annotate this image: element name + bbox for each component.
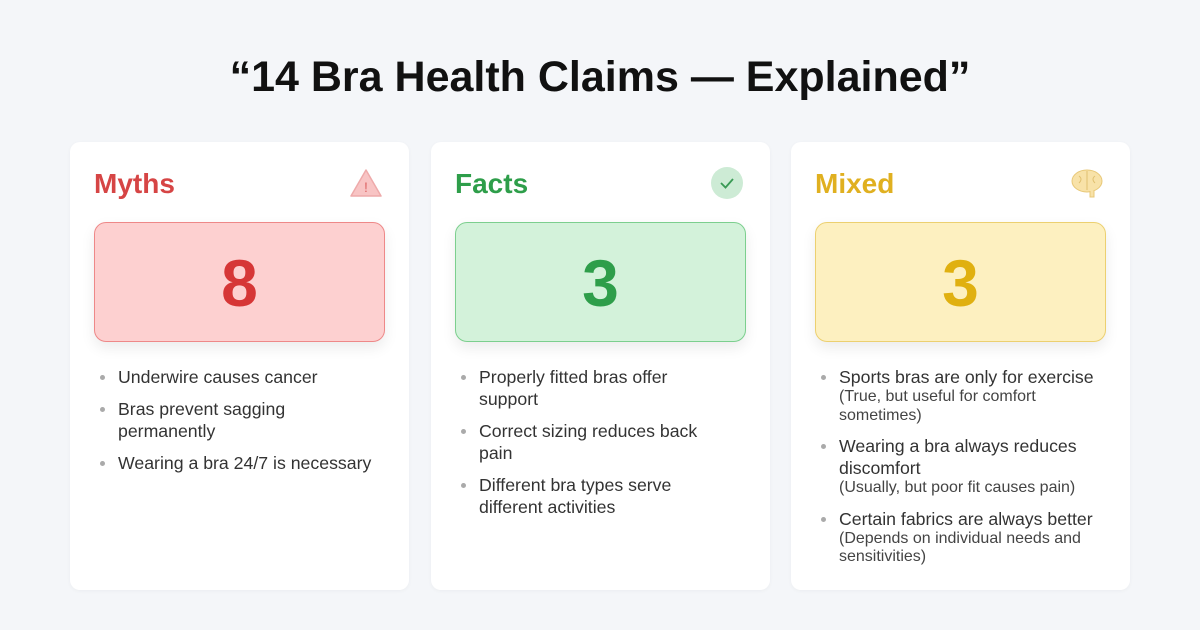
- list: mixed: Wearing a bra always reduces: [839, 436, 1077, 456]
- list: facts: Properly fitted bras offer: [479, 367, 667, 387]
- list: facts: pain: [479, 443, 512, 463]
- list: myths: [100, 367, 372, 473]
- list: myths: permanently: [118, 421, 215, 441]
- count: 3: 3: [942, 246, 979, 320]
- list: mixed: Sports bras are only for exercise: [839, 367, 1094, 387]
- count: 8: 8: [221, 246, 258, 320]
- icon: warning: !: [364, 179, 368, 195]
- count: 3: 3: [582, 246, 619, 320]
- list: facts: Correct sizing reduces back: [479, 421, 697, 441]
- icon: brain: [1072, 170, 1102, 198]
- heading: facts: Facts: [455, 168, 528, 199]
- list: facts: Different bra types serve: [479, 475, 671, 495]
- panel: facts: [431, 142, 770, 590]
- list: mixed: (Usually, but poor fit causes pain): [839, 479, 1075, 496]
- list: mixed: sometimes): [839, 406, 922, 424]
- panel: myths: [70, 142, 409, 590]
- list: myths: Bras prevent sagging: [118, 399, 285, 419]
- list: mixed: sensitivities): [839, 548, 926, 565]
- list: mixed: Certain fabrics are always better: [839, 508, 1093, 528]
- count: 3: [455, 222, 746, 342]
- count: 8: [94, 222, 385, 342]
- list: facts: different activities: [479, 497, 615, 517]
- list: myths: Underwire causes cancer: [118, 367, 318, 387]
- list: mixed: (Depends on individual needs and: [839, 530, 1081, 546]
- panel: mixed: [791, 142, 1130, 590]
- list: myths: Wearing a bra 24/7 is necessary: [118, 453, 371, 473]
- heading: mixed: Mixed: [815, 168, 894, 199]
- list: facts: support: [479, 389, 538, 409]
- icon: warning: [350, 169, 382, 197]
- icon: check: [711, 167, 743, 199]
- title: “14 Bra Health Claims — Explained”: [230, 53, 970, 101]
- list: mixed: (True, but useful for comfort: [839, 388, 1036, 405]
- count: 3: [815, 222, 1106, 342]
- heading: myths: Myths: [94, 168, 175, 199]
- list: mixed: [821, 367, 1094, 565]
- list: mixed: discomfort: [839, 458, 921, 478]
- list: facts: [461, 367, 698, 517]
